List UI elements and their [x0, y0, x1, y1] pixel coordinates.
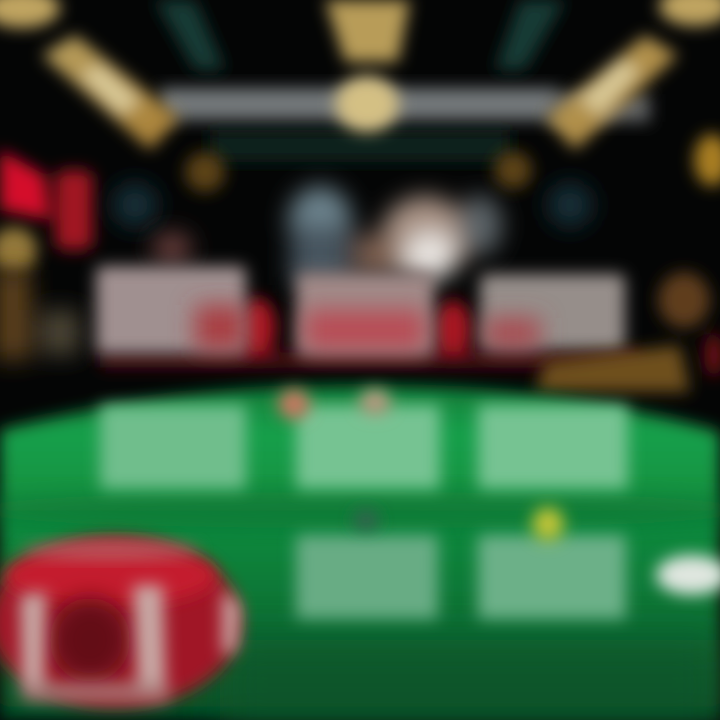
ceiling lights: [0, 0, 720, 162]
back panel right: [480, 274, 625, 350]
small markers: [278, 389, 564, 541]
back panel left: [96, 266, 246, 354]
chip white stripes: [20, 585, 240, 702]
light boxes row two: [296, 535, 626, 619]
gold corner lights: [0, 0, 720, 28]
teal streaks: [155, 0, 565, 162]
gold diagonal left: [42, 35, 180, 150]
red seat dividers: [100, 298, 640, 368]
red chip stack: [0, 536, 241, 708]
white card right: [656, 555, 720, 595]
red decor left: [0, 150, 93, 250]
chip body: [0, 536, 241, 708]
gold central lights: [325, 0, 410, 132]
small gold bulbs: [0, 134, 720, 273]
dim blue bulbs: [113, 183, 592, 227]
felt dark bottom: [220, 640, 720, 720]
chip shadow centre: [50, 598, 130, 682]
felt shadow band: [0, 492, 720, 528]
light boxes row one: [100, 405, 628, 489]
back panels: [96, 266, 625, 356]
gold rail right: [535, 272, 720, 392]
centre figures: [152, 186, 502, 285]
gold diagonal right: [545, 35, 678, 150]
back wall left strip: [0, 270, 80, 360]
panel red tint: [195, 305, 540, 350]
back panel centre: [296, 272, 434, 356]
grey light bar: [160, 88, 650, 122]
table felt: [0, 385, 720, 720]
felt surface: [0, 385, 720, 720]
chip top: [4, 546, 216, 606]
chip rim: [20, 540, 200, 560]
